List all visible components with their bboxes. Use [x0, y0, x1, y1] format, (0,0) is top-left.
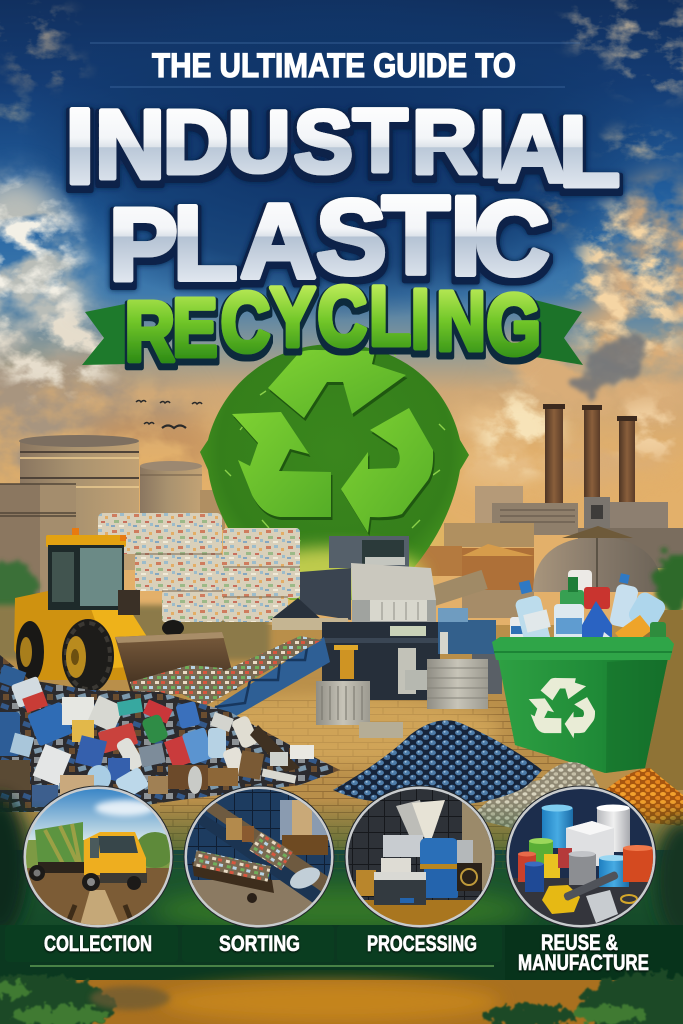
title: industrial: I [479, 91, 505, 196]
clouds: upper wisps [0, 0, 683, 234]
title: recycling: C [221, 276, 270, 370]
subtitle: THE ULTIMATE GUIDE TO [152, 47, 516, 85]
icon: recycling arrows [232, 350, 433, 533]
silver crate left [316, 681, 370, 725]
storage tanks [0, 435, 225, 594]
dome structure [533, 526, 662, 592]
ground [0, 605, 683, 870]
step band [0, 925, 683, 980]
pile: orange granules [595, 768, 683, 826]
factory [412, 404, 683, 618]
title: recycling: Y [270, 271, 316, 365]
truck cargo [35, 822, 83, 862]
title: industrial: R [412, 93, 477, 193]
label: manufacture: MANUFACTURE [518, 950, 649, 975]
title: industrial: D [163, 93, 228, 193]
green recycling disc [200, 344, 469, 603]
label: collection: COLLECTION [44, 931, 152, 956]
clouds: bright highlights [0, 180, 683, 470]
title: industrial: A [498, 96, 567, 202]
label: sorting: SORTING [219, 931, 300, 956]
pile: grey granules [470, 762, 612, 830]
ribbon banner [82, 300, 583, 365]
title: recycling: R [125, 286, 175, 380]
title: plastic: A [240, 182, 317, 300]
shredding machine [270, 536, 502, 738]
title: industrial: N [95, 90, 165, 199]
title: plastic: C [474, 180, 550, 298]
label: reuse: REUSE & [541, 930, 618, 955]
title: recycling: C [317, 270, 367, 364]
wheel loader [14, 528, 237, 697]
icon: bin recycling symbol [529, 678, 595, 738]
circle: reuse and manufacture [505, 785, 657, 930]
title: plastic: S [316, 178, 387, 296]
truck cab [84, 832, 146, 875]
plastic on bucket [130, 665, 232, 697]
title: recycling: G [486, 276, 541, 373]
title: recycling: L [369, 270, 411, 364]
title: plastic: T [382, 174, 450, 298]
title: industrial: L [559, 96, 620, 208]
circle: sorting [184, 785, 335, 930]
circle: collection [20, 785, 176, 928]
title rules [90, 43, 580, 87]
title: recycling: E [172, 282, 218, 375]
green recycling bin [492, 637, 674, 773]
title: industrial: T [353, 90, 407, 190]
title: plastic: I [450, 174, 481, 298]
inclined conveyor [178, 636, 330, 716]
soil and foliage footer [0, 973, 683, 1024]
blue side box [438, 620, 496, 654]
birds [136, 400, 202, 428]
tree right [654, 552, 683, 612]
circle: processing [345, 785, 495, 930]
title: industrial: U [228, 94, 290, 190]
title: plastic: L [173, 184, 238, 302]
pile: blue pellets [333, 720, 542, 805]
title: industrial: S [294, 92, 353, 191]
title: recycling: I [411, 273, 430, 367]
sky background [0, 0, 683, 700]
tree left [0, 560, 40, 616]
label: processing: PROCESSING [367, 931, 477, 956]
title: industrial: I [65, 86, 95, 206]
plastic bales [98, 513, 300, 622]
clouds: base bank [0, 175, 683, 490]
title: recycling: N [436, 275, 486, 369]
labels [44, 930, 649, 975]
loader bucket [115, 632, 237, 697]
title: plastic: P [109, 187, 178, 302]
lower green field [0, 795, 683, 985]
smoke from chimneys [567, 333, 646, 395]
silver crate right [427, 659, 488, 709]
plastic waste pile [0, 655, 340, 812]
recyclables in bin [510, 570, 668, 649]
